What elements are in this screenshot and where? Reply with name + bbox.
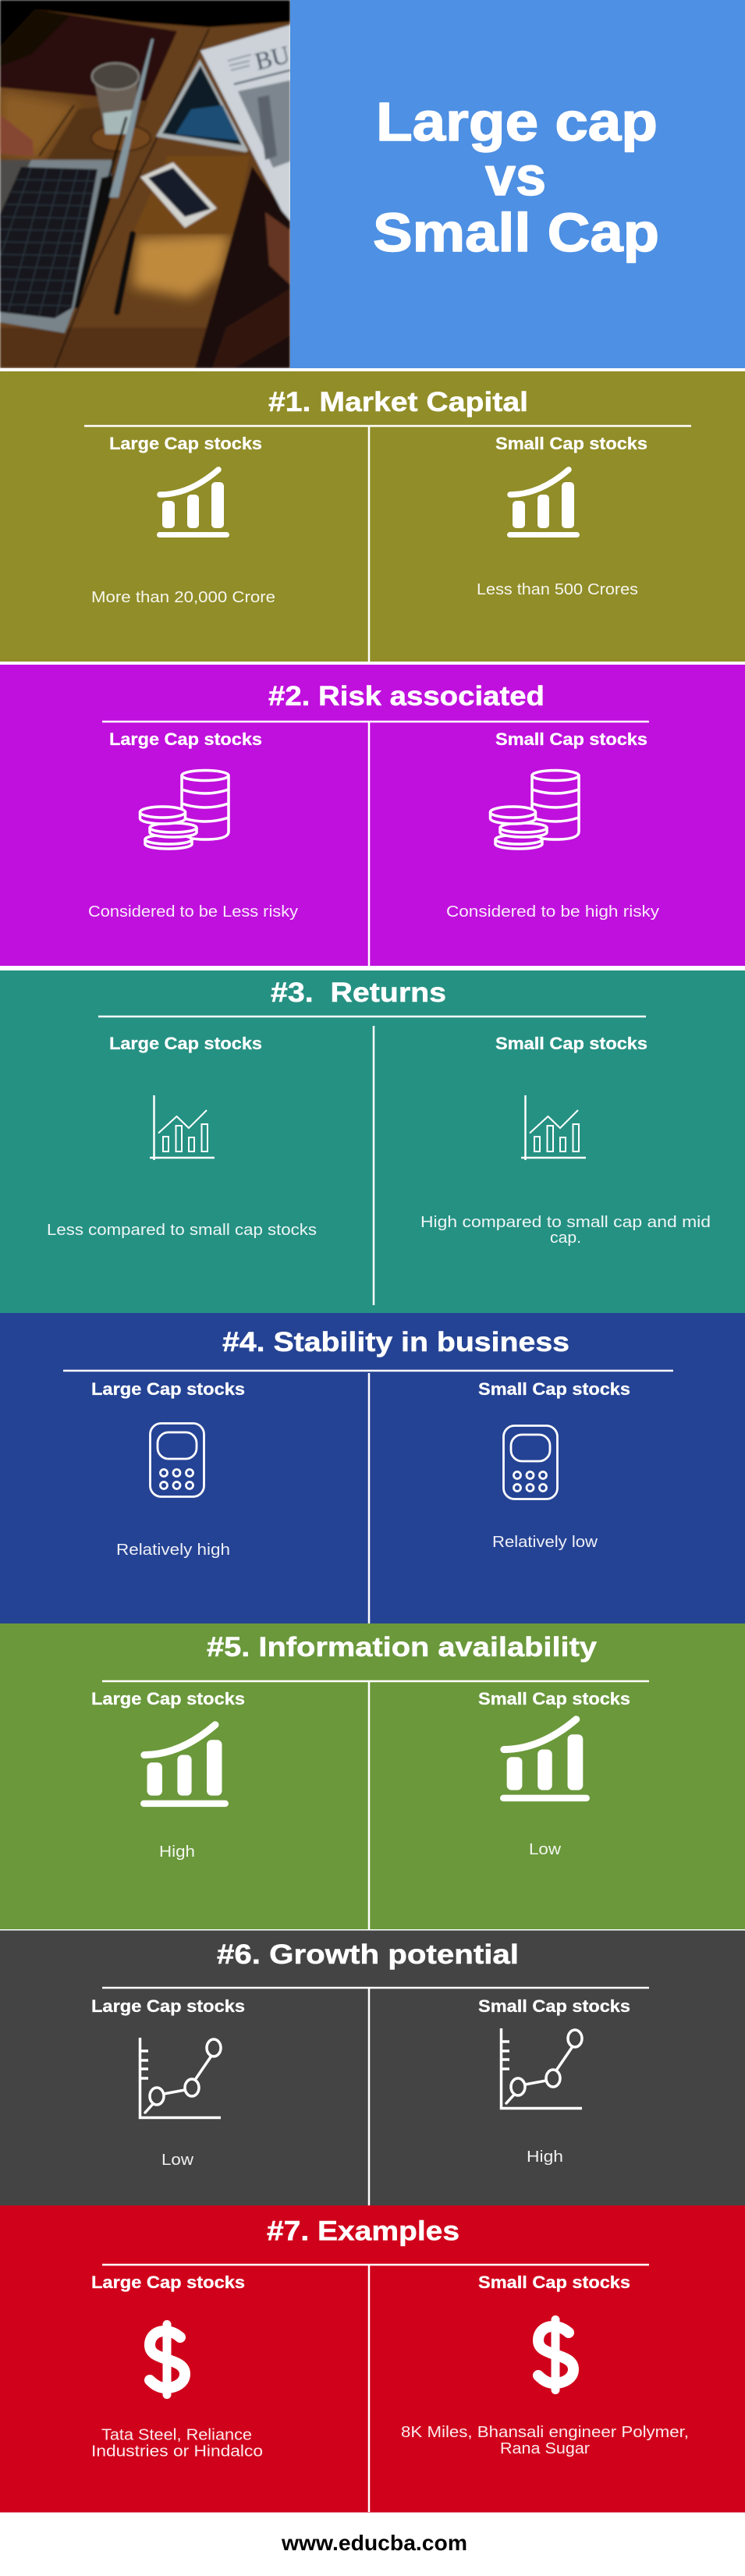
panel: #6 Growth potential: [0, 1930, 745, 2205]
label: large cap: Large Cap stocks: [91, 1379, 245, 1399]
text: small cap value: Low: [529, 1840, 561, 1858]
label: small cap: Small Cap stocks: [478, 1996, 630, 2016]
footer: website: www.educba.com: [281, 2531, 467, 2555]
label: large cap: Large Cap stocks: [109, 1034, 262, 1053]
label: large cap: Large Cap stocks: [91, 1689, 245, 1708]
panel: #1 Market Capital: [0, 371, 745, 662]
icon: coin stacks left: [140, 771, 229, 849]
label: large cap: Large Cap stocks: [109, 729, 262, 749]
text: small cap value: High compared to small cap and mid: [420, 1213, 711, 1231]
title: [373, 91, 659, 263]
label: small cap: Small Cap stocks: [495, 434, 647, 453]
title background: [290, 0, 745, 368]
header photo: desk with laptop, phone and newspaper: [0, 0, 293, 368]
icon: coin stacks right: [490, 771, 579, 849]
heading: #4. Stability in business: [222, 1327, 569, 1357]
header panel: [0, 0, 745, 368]
text: small cap value: Rana Sugar: [500, 2439, 590, 2457]
text: large cap value: Industries or Hindalco: [91, 2442, 263, 2461]
icon: bar chart growth left: [157, 470, 229, 538]
text: large cap value: [91, 2426, 263, 2461]
panel: #5 Information availability: [0, 1623, 745, 1929]
label: large cap: Large Cap stocks: [109, 434, 262, 453]
text: large cap value: Tata Steel, Reliance: [101, 2426, 252, 2443]
panel: #3 Returns: [0, 970, 745, 1313]
text: large cap value: More than 20,000 Crore: [91, 588, 275, 606]
icon: calculator right: [504, 1426, 557, 1499]
text: small cap value: 8K Miles, Bhansali engineer Polymer,: [401, 2423, 689, 2441]
icon: dotted line chart right: [501, 2028, 582, 2108]
text: small cap value: cap.: [550, 1229, 581, 1247]
label: small cap: Small Cap stocks: [478, 2273, 630, 2292]
panel: #7 Examples: [0, 2205, 745, 2512]
heading: #2. Risk associated: [268, 681, 545, 711]
heading: #7. Examples: [267, 2216, 459, 2247]
icon: calculator left: [150, 1423, 204, 1496]
text: large cap value: Relatively high: [116, 1541, 230, 1559]
icon: bar chart growth right: [507, 470, 580, 538]
heading: #1. Market Capital: [268, 387, 528, 417]
title: vs: [485, 146, 546, 207]
text: small cap value: Considered to be high risky: [446, 903, 660, 921]
label: small cap: Small Cap stocks: [478, 1689, 630, 1708]
icon: line and bar chart right: [521, 1095, 586, 1160]
text: large cap value: High: [159, 1843, 195, 1861]
label: small cap: Small Cap stocks: [478, 1379, 630, 1399]
label: small cap: Small Cap stocks: [495, 729, 647, 749]
text: small cap value: High: [527, 2148, 563, 2166]
panel: #4 Stability in business: [0, 1313, 745, 1623]
icon: dotted line chart left: [140, 2038, 221, 2117]
text: small cap value: Relatively low: [492, 1533, 598, 1551]
panel: #2 Risk associated: [0, 665, 745, 966]
icon: bar chart growth left: [140, 1725, 229, 1807]
heading: #6. Growth potential: [217, 1939, 519, 1970]
icon: dollar left: [150, 2325, 185, 2395]
label: large cap: Large Cap stocks: [91, 2273, 245, 2292]
title: Small Cap: [373, 202, 659, 263]
icon: line and bar chart left: [150, 1095, 215, 1160]
label: large cap: Large Cap stocks: [91, 1996, 245, 2016]
text: small cap value: [420, 1213, 711, 1247]
text: large cap value: Less compared to small cap stocks: [47, 1221, 317, 1239]
label: small cap: Small Cap stocks: [495, 1034, 647, 1053]
heading: #3. Returns: [271, 978, 446, 1008]
text: large cap value: Considered to be Less risky: [88, 903, 299, 921]
text: large cap value: Low: [161, 2151, 193, 2169]
text: small cap value: [401, 2423, 689, 2457]
title: Large cap: [376, 91, 658, 152]
text: small cap value: Less than 500 Crores: [477, 580, 638, 598]
icon: bar chart growth right: [500, 1719, 590, 1801]
icon: dollar right: [538, 2320, 573, 2390]
heading: #5. Information availability: [207, 1632, 598, 1662]
header photo: desk with laptop, phone and newspaper: BU: [252, 40, 293, 76]
